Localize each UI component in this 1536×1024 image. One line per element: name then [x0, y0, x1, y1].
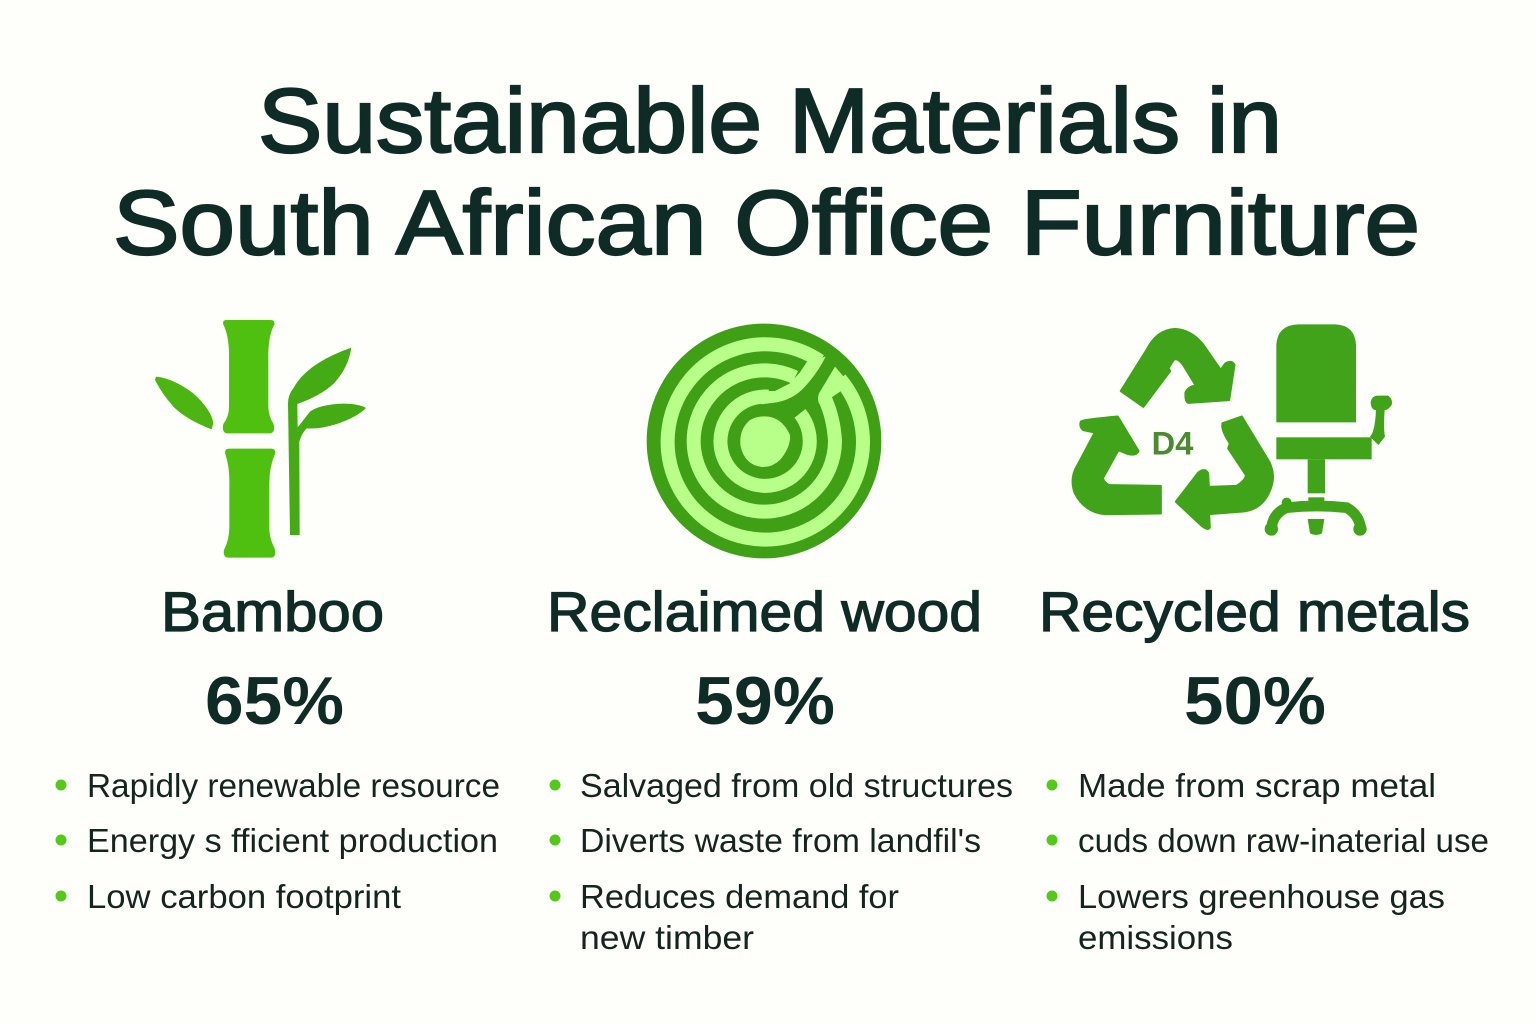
icon: bamboo — [155, 320, 366, 558]
bullet list: reclaimed wood: Diverts waste from landfil's — [580, 822, 981, 859]
bullet list: recycled metals: cuds down raw-inaterial use — [1078, 822, 1489, 859]
recycling code label: D4 — [1152, 425, 1194, 461]
bullet list: recycled metals: emissions — [1078, 919, 1233, 956]
bullet list: recycled metals: Made from scrap metal — [1078, 767, 1436, 804]
title — [113, 71, 1420, 274]
panel: bamboo — [56, 320, 500, 915]
panel: reclaimed wood — [547, 324, 1013, 956]
bullet list: bamboo: Low carbon footprint — [87, 878, 401, 915]
heading: bamboo: Bamboo — [161, 580, 384, 643]
icon: recycling symbol and office chair — [1073, 324, 1392, 536]
bullet list: bamboo: Energy s fficient production — [87, 822, 498, 859]
bullet list: recycled metals: Lowers greenhouse gas — [1078, 878, 1445, 915]
statistic: bamboo: 65% — [205, 663, 344, 739]
heading: reclaimed wood: Reclaimed wood — [547, 580, 982, 643]
heading: recycled metals: Recycled metals — [1039, 580, 1470, 643]
recycling arrows — [1073, 329, 1273, 529]
bullet list: reclaimed wood: new timber — [580, 919, 754, 956]
title: South African Office Furniture — [113, 173, 1420, 274]
office chair — [1265, 324, 1392, 536]
icon: wood rings — [647, 324, 881, 558]
bullet list: reclaimed wood: Salvaged from old structures — [580, 767, 1013, 804]
statistic: reclaimed wood: 59% — [695, 663, 835, 739]
title: Sustainable Materials in — [258, 71, 1282, 172]
bullet list: bamboo — [56, 767, 500, 915]
panel: recycled metals — [1039, 324, 1489, 956]
bullet list: recycled metals — [1046, 767, 1489, 956]
statistic: recycled metals: 50% — [1184, 663, 1326, 739]
bullet list: bamboo: Rapidly renewable resource — [87, 767, 500, 804]
bullet list: reclaimed wood — [550, 767, 1013, 956]
bullet list: reclaimed wood: Reduces demand for — [580, 878, 899, 915]
